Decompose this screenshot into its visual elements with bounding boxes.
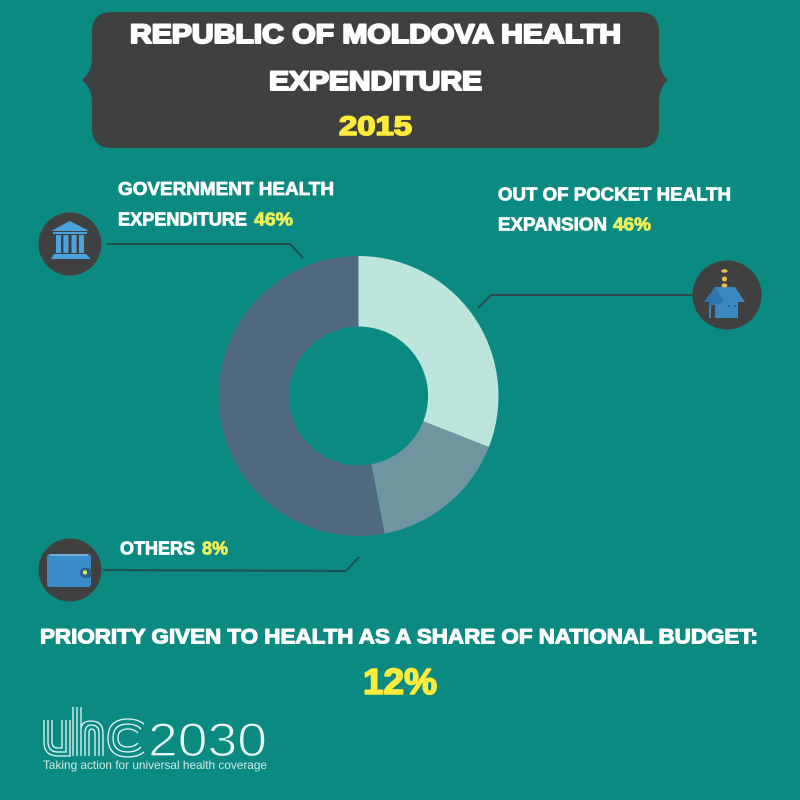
label: government xyxy=(118,178,334,230)
title text: REPUBLIC OF MOLDOVA HEALTH xyxy=(130,19,621,49)
label: government: 46% xyxy=(254,208,293,230)
label: out of pocket xyxy=(498,184,731,234)
segment: out of pocket xyxy=(358,256,499,447)
label: others: 8% xyxy=(202,538,228,558)
label: government: EXPENDITURE xyxy=(118,208,247,230)
label: out of pocket: OUT OF POCKET HEALTH xyxy=(498,184,731,204)
connector: others xyxy=(103,557,359,571)
logo tagline: Taking action for universal health coverage xyxy=(43,758,267,772)
icon: house with coins xyxy=(692,260,762,330)
donut chart xyxy=(219,256,499,536)
label: out of pocket: EXPANSION xyxy=(498,214,607,234)
label: out of pocket: 46% xyxy=(613,214,651,234)
connector: out of pocket xyxy=(478,295,695,308)
title text: EXPENDITURE xyxy=(269,66,482,96)
priority value: 12% xyxy=(363,661,437,702)
label: government: GOVERNMENT HEALTH xyxy=(118,178,334,199)
logo mark xyxy=(44,707,144,757)
segment: government xyxy=(219,256,384,536)
title text xyxy=(130,19,621,96)
logo year: 2030 xyxy=(148,713,267,766)
label: others: OTHERS xyxy=(120,538,195,558)
icon: wallet xyxy=(38,538,102,602)
icon: bank xyxy=(38,212,102,276)
priority heading: PRIORITY GIVEN TO HEALTH AS A SHARE OF NATIONAL BUDGET: xyxy=(40,626,758,648)
title banner xyxy=(82,12,668,148)
logo: uhc2030 xyxy=(43,707,267,772)
connector: government xyxy=(107,244,303,258)
year: 2015 xyxy=(339,111,412,141)
segment: others xyxy=(371,421,489,534)
